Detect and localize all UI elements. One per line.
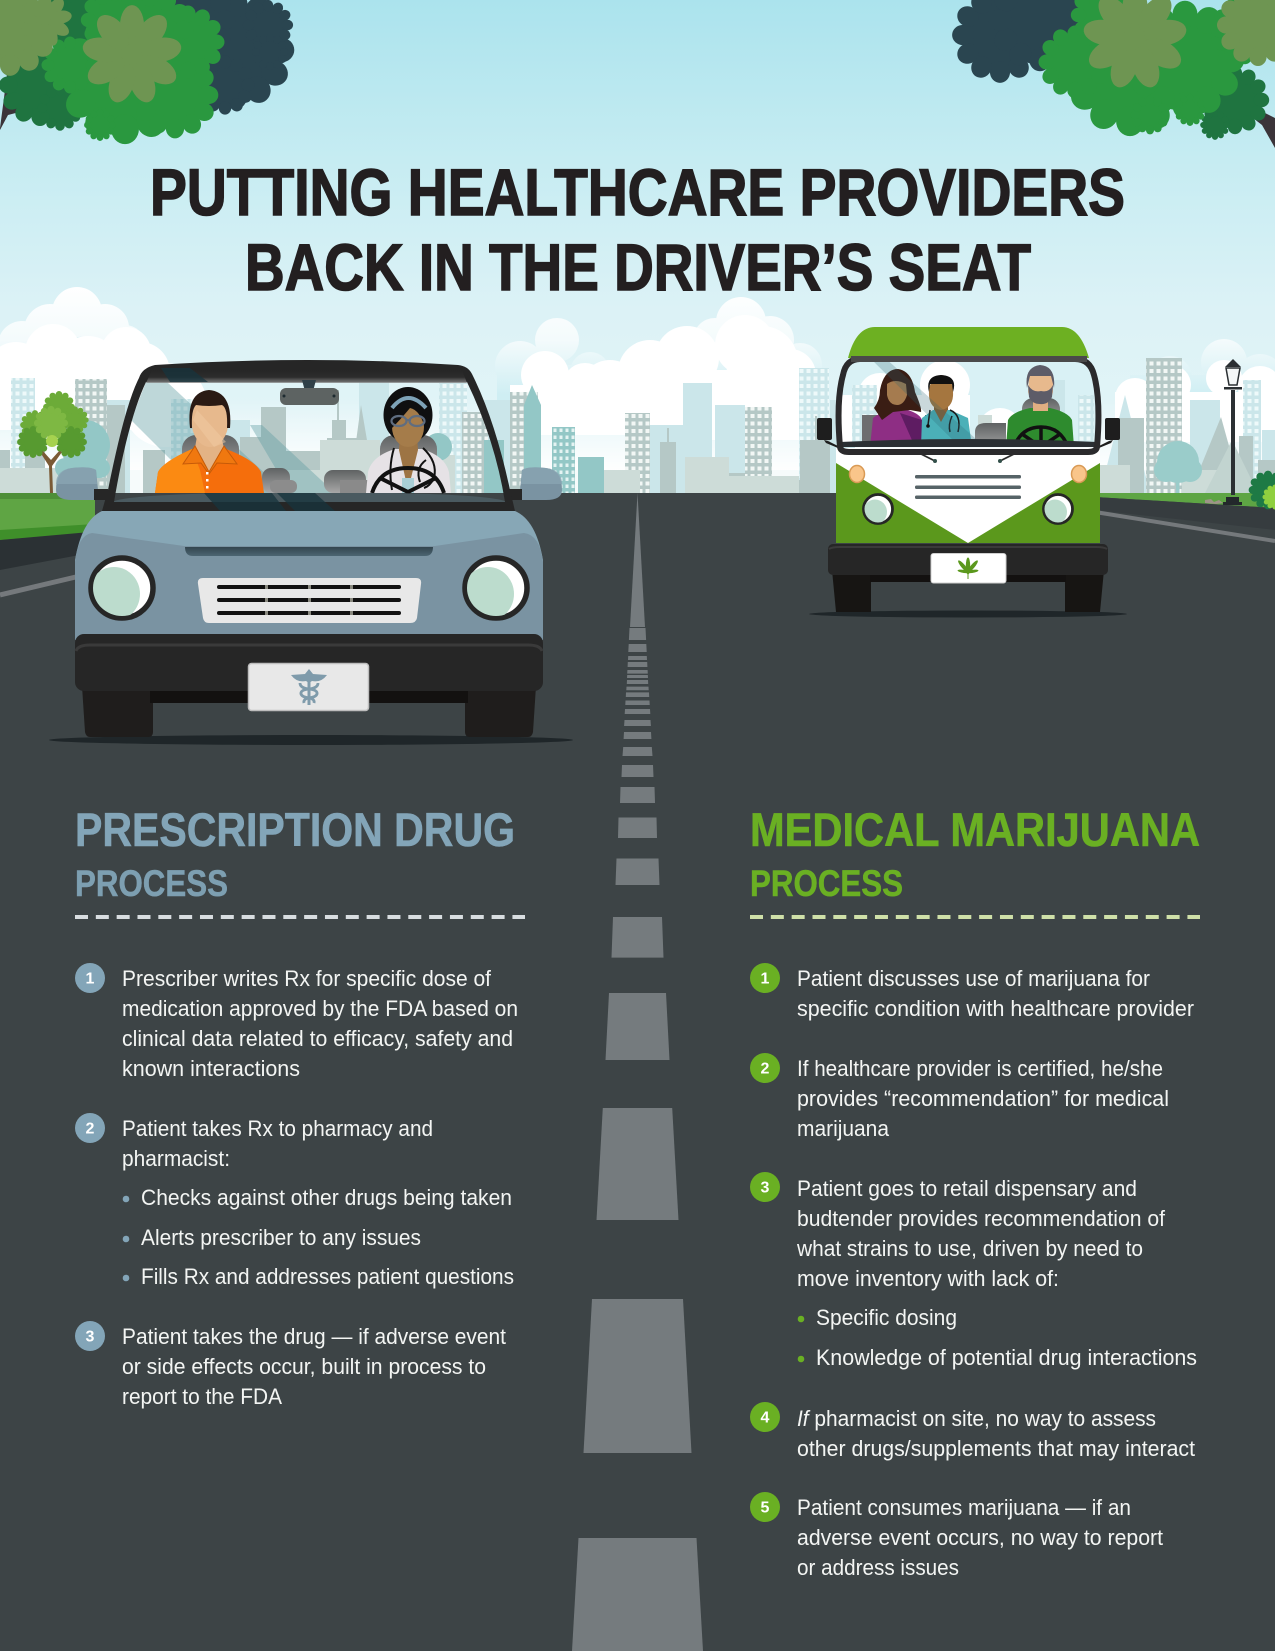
step 2: marijuana	[797, 1116, 889, 1141]
icon: street lamp	[1223, 359, 1242, 505]
step 2	[75, 1113, 514, 1289]
van shadow	[809, 610, 1127, 618]
step 2: pharmacist:	[122, 1146, 230, 1171]
step 2	[750, 1053, 1169, 1141]
step 1: specific condition with healthcare provider	[797, 996, 1194, 1021]
clouds	[0, 287, 1275, 495]
step 2: Fills Rx and addresses patient questions	[141, 1264, 514, 1289]
step 1	[75, 963, 518, 1081]
windshield glare on frame	[161, 368, 335, 511]
passenger: doctor in white coat	[324, 387, 451, 493]
icon: foliage tree top left	[0, 0, 294, 144]
heading: prescription drug: PRESCRIPTION DRUG	[75, 803, 515, 856]
step 1	[750, 963, 1194, 1021]
step 3: report to the FDA	[122, 1384, 282, 1409]
van glare	[874, 362, 976, 439]
step 2: provides “recommendation” for medical	[797, 1086, 1169, 1111]
heading: medical marijuana: MEDICAL MARIJUANA	[750, 803, 1200, 856]
car lower body panel	[75, 533, 543, 640]
driver: man in orange shirt	[155, 390, 297, 493]
step 3: Patient takes the drug — if adverse event	[122, 1324, 507, 1349]
van passenger: healthcare provider in scrubs	[921, 375, 971, 440]
step 3: 3	[86, 1328, 95, 1346]
step 2: 2	[761, 1060, 770, 1078]
car plate with caduceus	[248, 664, 368, 710]
car hood slot	[185, 547, 433, 556]
car mirrors	[56, 467, 562, 500]
step 2: If healthcare provider is certified, he/she	[797, 1056, 1163, 1081]
step 1: 1	[761, 970, 770, 988]
car: prescription drug car	[49, 360, 573, 745]
windshield background glare	[131, 382, 335, 493]
step 4: 4	[761, 1410, 770, 1426]
car grille	[198, 578, 421, 623]
van wipers	[917, 452, 1018, 461]
van passenger: woman in purple	[862, 369, 922, 442]
step 5	[750, 1492, 1164, 1580]
van plate with leaf	[931, 554, 1006, 583]
car headlights	[88, 558, 527, 621]
icon: foliage tree top right	[952, 0, 1275, 148]
icon: teal tree right	[1154, 441, 1202, 493]
title	[150, 155, 1125, 304]
step 5: or address issues	[797, 1555, 959, 1580]
step 4: other drugs/supplements that may interact	[797, 1436, 1196, 1461]
step 3	[75, 1321, 507, 1409]
van wheels	[832, 570, 1104, 612]
van headlights	[863, 494, 1072, 524]
step 1: clinical data related to efficacy, safety and	[122, 1026, 513, 1051]
step 3: Knowledge of potential drug interactions	[816, 1345, 1197, 1370]
step 3: 3	[761, 1180, 770, 1196]
step 3: what strains to use, driven by need to	[796, 1236, 1143, 1261]
step 3: move inventory with lack of:	[797, 1266, 1059, 1291]
icon: green roadside tree	[17, 391, 89, 493]
city skyline	[0, 358, 1275, 493]
car body	[75, 511, 543, 640]
step 1: medication approved by the FDA based on	[122, 996, 518, 1021]
rear-view mirror	[280, 380, 339, 405]
step 3: Patient goes to retail dispensary and	[797, 1176, 1137, 1201]
car shadow	[49, 735, 573, 745]
van roof	[848, 327, 1089, 358]
van driver: bearded man in green	[1006, 365, 1074, 442]
step 3: budtender provides recommendation of	[797, 1206, 1166, 1231]
van windshield frame	[839, 356, 1098, 452]
step 5: Patient consumes marijuana — if an	[797, 1495, 1131, 1520]
step 2: 2	[86, 1120, 95, 1138]
step 1: Patient discusses use of marijuana for	[797, 966, 1150, 991]
step 2: Checks against other drugs being taken	[141, 1185, 512, 1210]
step 1: 1	[86, 970, 95, 988]
title: BACK IN THE DRIVER’S SEAT	[245, 230, 1031, 304]
road	[0, 493, 1275, 1651]
sky background	[0, 0, 1275, 500]
van windshield interior	[842, 362, 1096, 447]
car bumper	[75, 634, 543, 691]
step 2: Patient takes Rx to pharmacy and	[122, 1116, 433, 1141]
step 5: adverse event occurs, no way to report	[797, 1525, 1164, 1550]
car wheels	[82, 686, 536, 737]
van mirrors	[817, 418, 1120, 448]
van body	[836, 448, 1100, 543]
van lamps	[850, 466, 1086, 482]
step 4	[750, 1402, 1196, 1461]
panel: medical marijuana process	[750, 803, 1200, 1580]
step 1: Prescriber writes Rx for specific dose of	[122, 966, 492, 991]
heading: process: PROCESS	[750, 863, 903, 904]
road centre line dashes	[572, 493, 703, 1651]
step 1: known interactions	[122, 1056, 300, 1081]
van: medical marijuana van	[809, 327, 1127, 618]
heading: process: PROCESS	[75, 863, 228, 904]
step 3: Specific dosing	[816, 1305, 957, 1330]
car windshield frame and dash	[102, 360, 515, 511]
step 3: or side effects occur, built in process to	[122, 1354, 486, 1379]
panel: prescription drug process	[75, 803, 525, 1409]
step 3	[750, 1172, 1197, 1370]
icon: roadside bush	[1205, 471, 1275, 510]
step 5: 5	[761, 1500, 770, 1516]
van bumper	[828, 544, 1108, 575]
van middle seat	[975, 423, 1006, 440]
step 4: If pharmacist on site, no way to assess	[797, 1406, 1156, 1431]
step 2: Alerts prescriber to any issues	[141, 1225, 421, 1250]
van grille	[915, 475, 1021, 499]
